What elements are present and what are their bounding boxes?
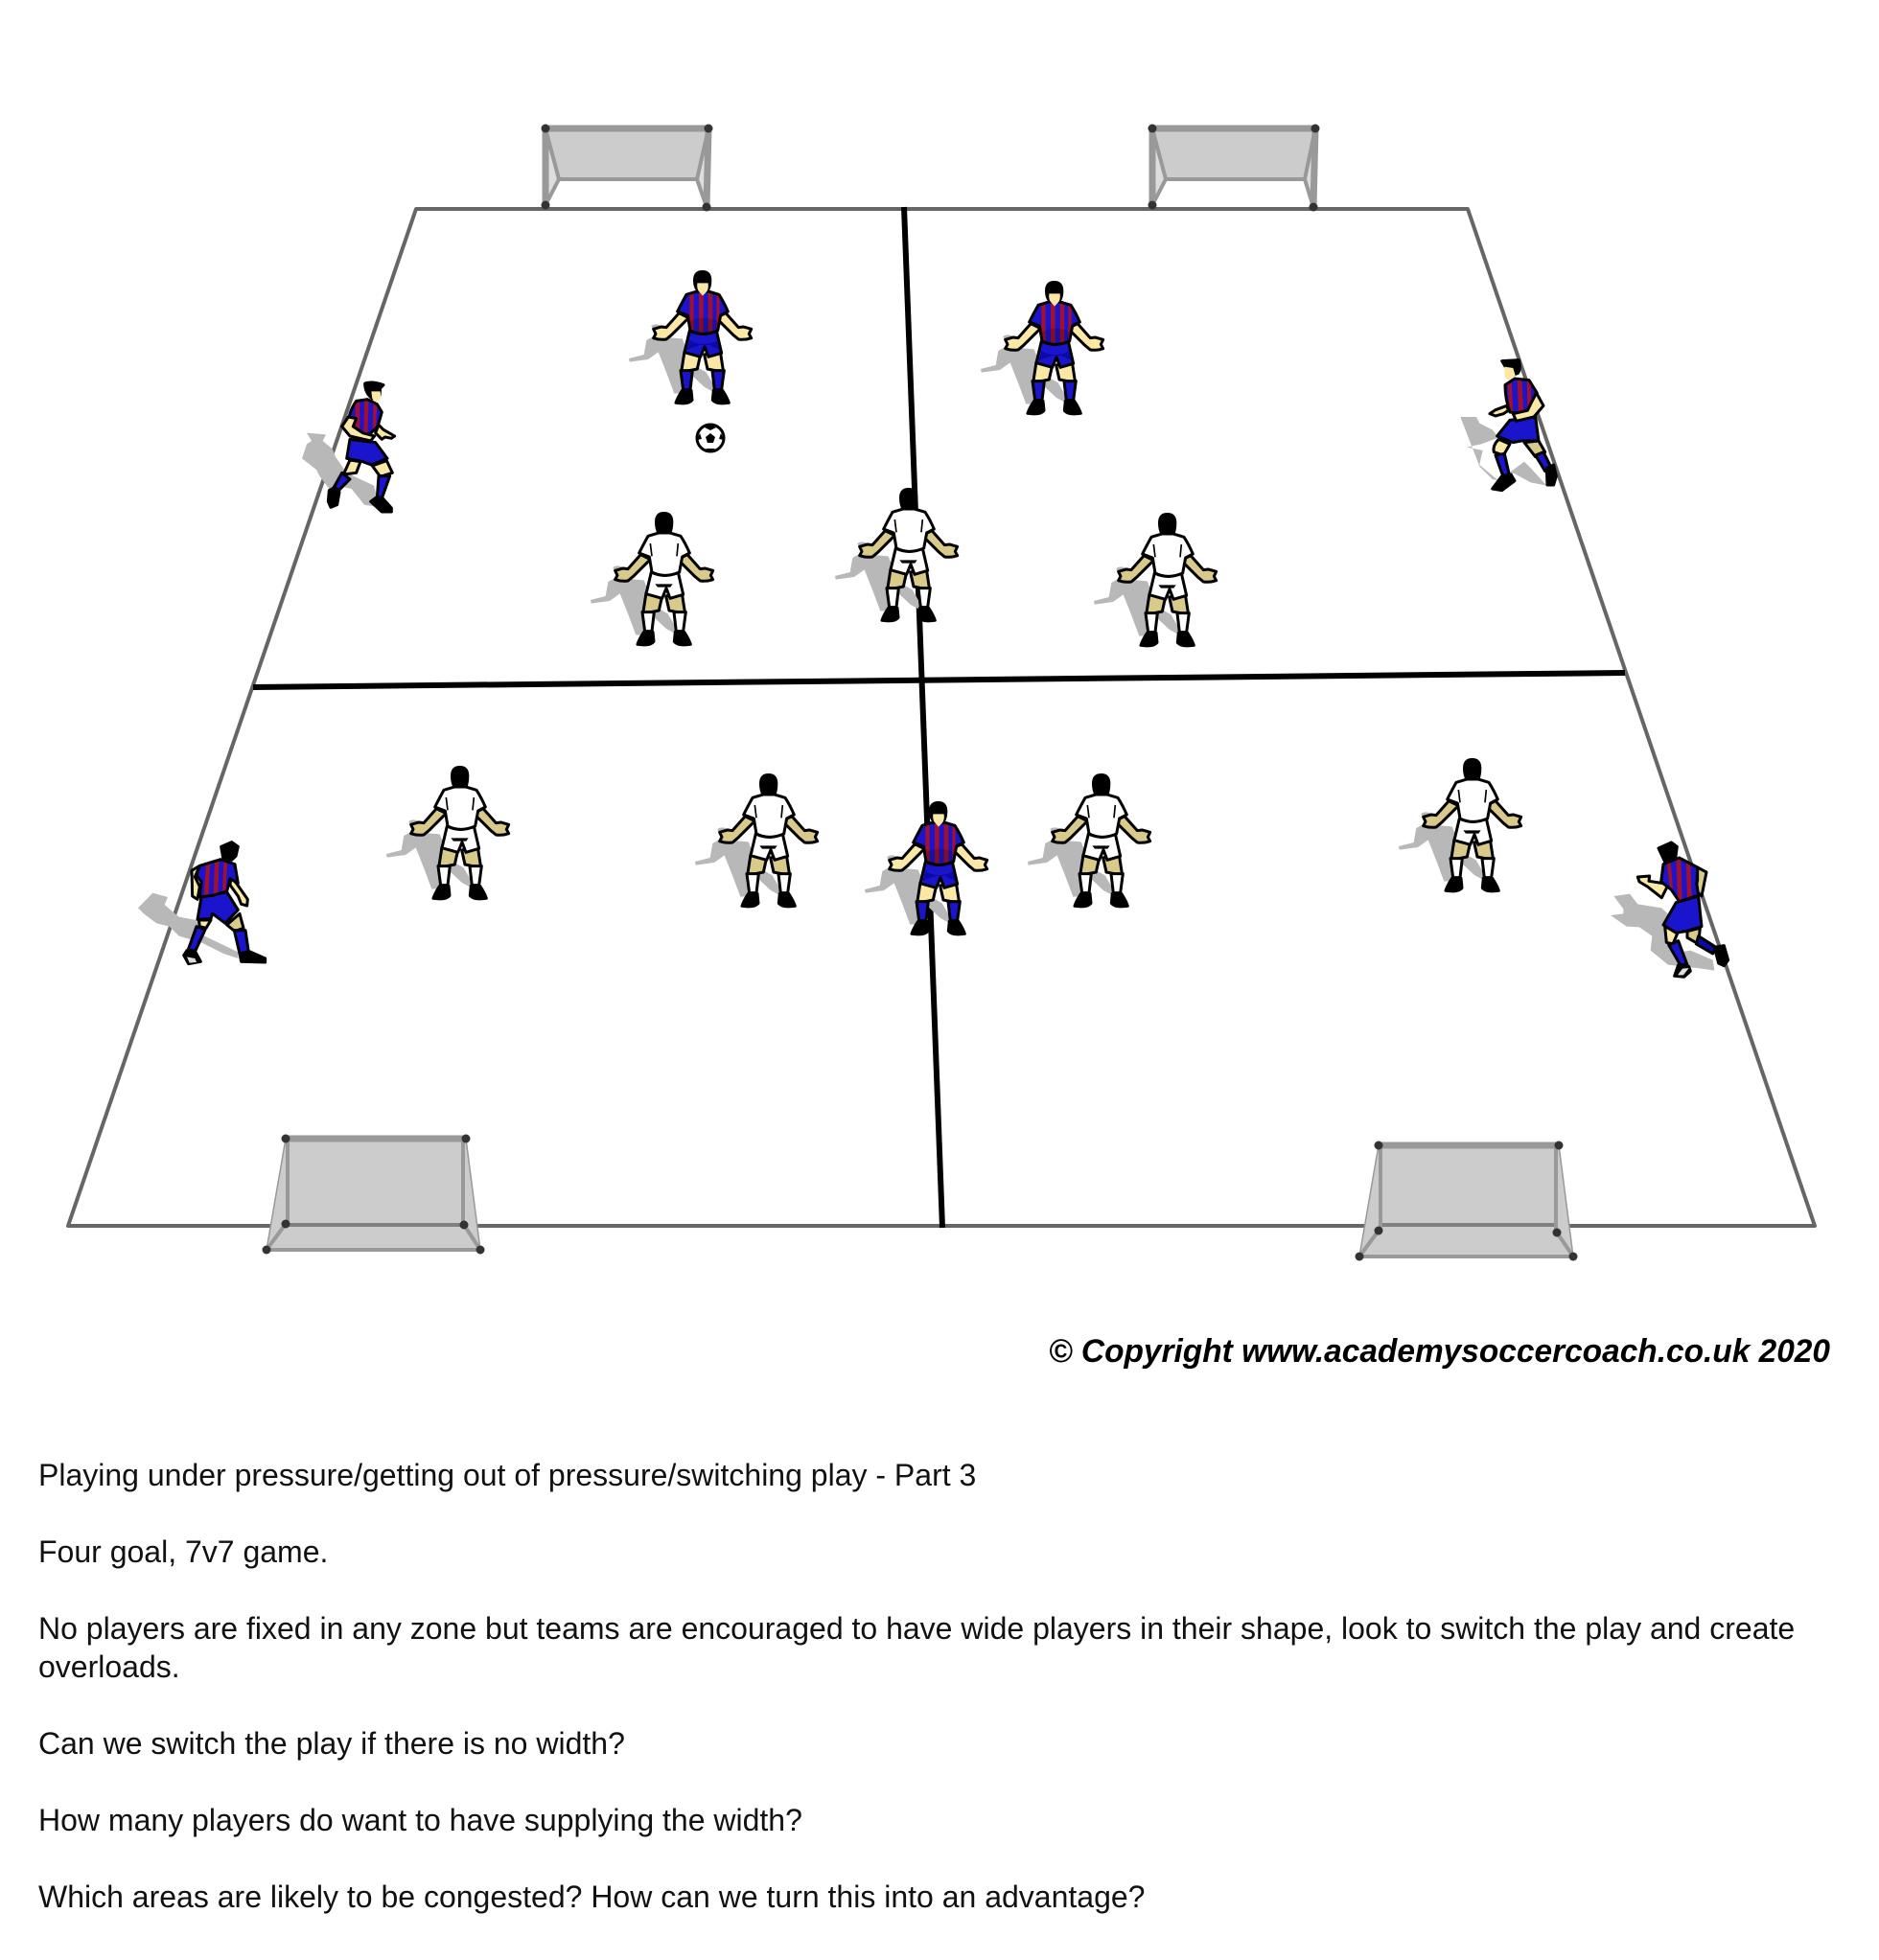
player: red team, top centre-right [981, 281, 1103, 414]
coaching question 2: How many players do want to have supplying the width? [38, 1803, 802, 1837]
copyright notice: © Copyright www.academysoccercoach.co.uk 2020 [1049, 1333, 1830, 1370]
goal: top right [1148, 125, 1319, 211]
coaching question 3: Which areas are likely to be congested? How can we turn this into an advantage? [38, 1879, 1145, 1914]
player: red team, top-left wide [302, 382, 395, 512]
player: white team 4 [386, 766, 509, 899]
player: white team 5 [695, 773, 818, 907]
player: red team, lower-left wide [138, 842, 266, 964]
football pitch [68, 207, 1815, 1228]
player: red team, lower-right wide [1611, 842, 1728, 977]
description text [38, 1458, 1795, 1914]
player: white team 3 [1094, 513, 1217, 646]
goal: bottom right [1356, 1141, 1578, 1261]
rules paragraph: No players are fixed in any zone but teams are encouraged to have wide players in their shape, look to switch the play and create [38, 1611, 1795, 1646]
player: red team, lower centre [865, 801, 987, 934]
player: white team 2 [835, 488, 958, 621]
title line: Playing under pressure/getting out of pressure/switching play - Part 3 [38, 1458, 976, 1492]
football [697, 425, 724, 451]
goal: top left [541, 125, 713, 211]
subtitle line: Four goal, 7v7 game. [38, 1534, 328, 1569]
player: white team 1 [591, 512, 713, 645]
player: white team 7 [1399, 758, 1521, 891]
coaching question 1: Can we switch the play if there is no width? [38, 1726, 625, 1761]
rules paragraph continued: overloads. [38, 1649, 180, 1684]
player: white team 6 [1028, 773, 1150, 907]
halfway line horizontal [253, 673, 1625, 687]
goal: bottom left [263, 1135, 485, 1254]
pitch outline [68, 209, 1815, 1226]
halfway line vertical [904, 207, 942, 1228]
player: red team, top centre-left [629, 270, 752, 404]
player: red team, top-right wide [1460, 360, 1556, 491]
